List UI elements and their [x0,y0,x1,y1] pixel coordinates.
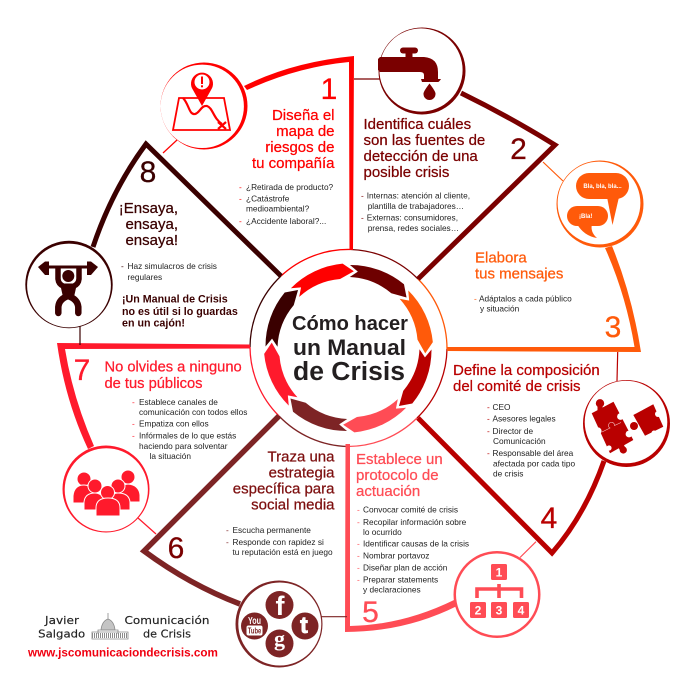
bullets 3: Adáptalos a cada público [479,294,572,304]
icon: social networks: g [274,626,285,651]
bullets 5: - [357,517,360,527]
bullets 4: Comunicación [493,436,546,446]
panel 4 connector [616,352,619,381]
heading 4: Define la composición [453,362,600,379]
icon: puzzle [583,380,670,467]
panel 3 connector [543,162,563,181]
heading 5: actuación [356,483,420,500]
bullets 6: - [226,525,229,535]
bullets 4: CEO [492,402,511,412]
bullets 6: Responde con rapidez si [232,537,324,547]
callout: manual de crisis: en un cajón! [122,318,185,330]
bullets 3: - [474,294,477,304]
icon: social networks: Tube [248,626,262,636]
icon: org chart: 3 [496,604,503,618]
panel 1 outline [244,56,354,250]
heading 5: Establece un [356,451,443,468]
bullets 7: comunicación con todos ellos [139,407,247,417]
panel 8: ensaya [25,144,281,345]
bullets 5: lo ocurrido [363,527,402,537]
bullets 6: - [226,537,229,547]
author name: Salgado [38,627,85,640]
footer logo and url [27,613,218,660]
center hub [250,249,447,446]
icon: social networks: You [248,616,261,627]
panel 6: social media [144,416,347,668]
bullets 4: - [487,414,490,424]
icon: org chart: 1 [496,566,503,580]
heading 6: Traza una [268,449,335,466]
bullets 5: Nombrar portavoz [363,551,429,561]
bullets 7: Establece canales de [139,397,218,407]
icon: capitol building [92,613,128,639]
bullets 4: Asesores legales [492,414,556,424]
author name: Javier [44,614,80,627]
bullets 4: - [487,448,490,458]
panel 3: elabora tus mensajes [447,160,644,352]
bullets 7: - [132,397,135,407]
heading 1: riesgos de [265,139,334,156]
bullets 4: - [487,426,490,436]
panel 1: mapa de riesgos [160,56,354,250]
icon: faucet [378,28,466,114]
icon: org chart: 4 [518,604,525,618]
bullets 4: de crisis [493,468,523,478]
heading 2: detección de una [364,148,478,165]
panel 8 connector [79,326,81,345]
bullets 8: regulares [128,272,162,282]
bullets 1: ¿Catástrofe [246,194,290,204]
icon: group of people [62,446,150,532]
number 4: 4 [541,502,557,535]
heading 1: mapa de [276,123,334,140]
panel 6 connector [321,616,347,618]
panel 7 connector [138,518,156,534]
heading 6: estrategia [269,465,335,482]
panel 2 connector [354,78,380,80]
bullets 2: prensa, redes sociales… [368,223,459,233]
bullets 5: y declaraciones [363,585,421,595]
brand name: Comunicación [124,614,210,627]
bullets 7: Infórmales de lo que estás [139,431,236,441]
bullets 4: afectada por cada tipo [493,458,575,468]
number 1: 1 [321,73,337,106]
bullets 2: Internas: atención al cliente, [367,191,470,201]
bullets 1: ¿Accidente laboral?... [246,216,326,226]
bullets 3: y situación [480,304,520,314]
panel 2 outline [418,93,555,279]
panel 4 outline [418,418,604,553]
bullets 5: - [357,563,360,573]
heading 7: No olvides a ninguno [104,360,242,376]
bullets 7: la situación [150,451,191,461]
icon: speech bubbles: ¡Bla! [579,214,592,220]
bullets 6: tu reputación está en juego [232,547,333,557]
bullets 8: - [121,261,124,271]
circular arrows [250,250,447,446]
bullets 2: Externas: consumidores, [367,213,458,223]
bullets 7: haciendo para solventar [139,441,228,451]
panel 8 outline [93,144,281,276]
icon: weightlifter [25,241,113,328]
bullets 5: - [357,539,360,549]
heading 3: Elabora [475,250,527,267]
bullets 4: Responsable del área [492,448,574,458]
bullets 5: Preparar statements [363,575,438,585]
panel 3 outline [447,246,641,352]
icon: social networks [236,580,322,668]
heading 7: de tus públicos [104,376,202,392]
title: Cómo hacer [292,312,408,335]
bullets 7: - [132,419,135,429]
panel 6 outline [144,416,279,604]
bullets 7: - [132,431,135,441]
callout: manual de crisis: no es útil si lo guardas [122,306,238,318]
heading 8: ¡Ensaya, [119,200,178,217]
heading 4: del comité de crisis [453,378,581,395]
title: de Crisis [293,358,405,386]
bullets 1: medioambiental? [246,204,310,214]
bullets 5: Recopilar información sobre [363,517,467,527]
panel 1 connector [163,140,177,153]
number 8: 8 [140,156,156,189]
number 3: 3 [605,311,621,344]
heading 6: social media [251,497,335,514]
icon: social networks: f [276,591,286,621]
bullets 5: Identificar causas de la crisis [363,539,469,549]
panel 5 connector [520,542,536,558]
bullets 4: Director de [492,426,533,436]
heading 1: Diseña el [272,107,334,124]
number 6: 6 [168,532,184,565]
callout: manual de crisis: ¡Un Manual de Crisis [122,294,228,306]
website url: www.jscomunicaciondecrisis.com [27,647,218,660]
icon: risk map [160,62,248,150]
panel 5: protocolo de actuación [345,444,540,638]
bullets 4: - [487,402,490,412]
panel 5 outline [345,444,457,632]
icon: speech bubbles: Bla, bla, bla... [583,184,622,190]
heading 8: ensaya, [125,216,178,233]
icon: social networks: t [300,612,308,638]
bullets 8: Haz simulacros de crisis [128,261,217,271]
number 2: 2 [510,133,527,166]
brand name: de Crisis [143,627,191,640]
bullets 2: - [361,191,364,201]
bullets 5: Diseñar plan de acción [363,563,448,573]
icon: org chart: 2 [475,604,482,618]
heading 8: ensaya! [125,232,178,249]
heading 5: protocolo de [356,467,439,484]
heading 6: específica para [233,481,335,498]
heading 3: tus mensajes [475,266,563,283]
bullets 6: Escucha permanente [232,525,311,535]
heading 1: tu compañía [252,155,335,172]
panel 7: tus públicos [57,343,250,534]
heading 2: son las fuentes de [364,132,485,149]
bullets 2: plantilla de trabajadores… [368,201,464,211]
icon: org chart [454,551,540,638]
bullets 1: - [239,216,242,226]
icon: speech bubbles [556,160,644,248]
bullets 5: - [357,551,360,561]
bullets 5: - [357,505,360,515]
panel 2: fuentes de detección [354,28,555,279]
bullets 5: Convocar comité de crisis [363,505,458,515]
bullets 5: - [357,575,360,585]
bullets 2: - [361,213,364,223]
heading 2: posible crisis [364,164,449,181]
heading 2: Identifica cuáles [364,116,471,133]
number 5: 5 [362,596,379,629]
panel 4: comité de crisis [418,352,670,553]
bullets 7: Empatiza con ellos [139,419,209,429]
panel 7 outline [57,343,250,449]
title: un Manual [293,335,406,360]
number 7: 7 [74,354,90,387]
bullets 1: - [239,194,242,204]
bullets 1: - [239,182,242,192]
ring of thin arcs [250,249,447,446]
bullets 1: ¿Retirada de producto? [246,182,334,192]
